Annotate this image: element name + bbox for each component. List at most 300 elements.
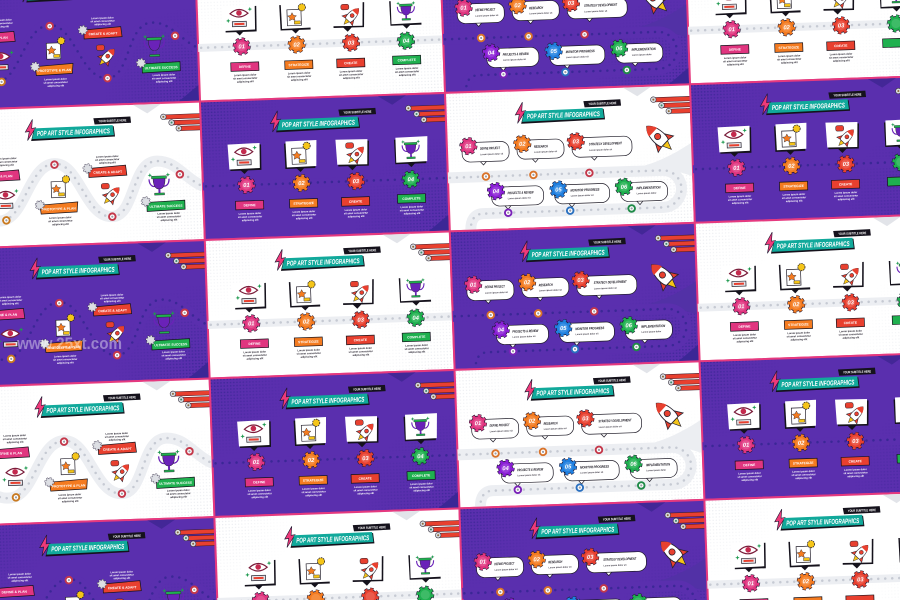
icon cards with numbered gears: 01 bbox=[743, 443, 749, 449]
four icon cards with numbered gears: DEFINE bbox=[244, 203, 257, 208]
four icon cards with numbered gears: adipiscing elit bbox=[408, 350, 425, 354]
four icon cards with numbered gears: sit amet consectetur bbox=[247, 492, 272, 496]
winding road steps: adipiscing elit bbox=[109, 438, 126, 442]
road with six numbered speech bubbles: Lorem ipsum dolor sit bbox=[503, 58, 526, 62]
winding road steps: Lorem ipsum dolor bbox=[157, 212, 180, 216]
road with six numbered speech bubbles: 03 bbox=[582, 416, 590, 422]
icon cards with numbered gears: STRATEGIZE bbox=[788, 322, 810, 327]
road with six numbered speech bubbles: Lorem ipsum dolor sit bbox=[534, 150, 557, 154]
heading bbox=[769, 364, 900, 392]
winding road steps: sit amet consectetur bbox=[90, 19, 115, 23]
panel: road slide, white, row four bbox=[455, 361, 705, 509]
four icon cards with numbered gears: 02 bbox=[293, 42, 301, 49]
four icon cards with numbered gears: 02 bbox=[298, 181, 306, 187]
road with six numbered speech bubbles: 03 bbox=[568, 1, 575, 7]
four icon cards with numbered gears: Lorem ipsum dolor bbox=[234, 73, 257, 77]
heading: YOUR SUBTITLE HERE bbox=[598, 378, 627, 383]
road with six numbered speech bubbles: 05 bbox=[555, 187, 563, 194]
heading: YOUR SUBTITLE HERE bbox=[108, 395, 137, 400]
road with six numbered speech bubbles: 02 bbox=[519, 142, 526, 148]
icon cards with numbered gears: adipiscing elit bbox=[741, 478, 758, 482]
winding road steps: Lorem ipsum dolor bbox=[59, 493, 81, 497]
four icon cards with numbered gears: Lorem ipsum dolor bbox=[340, 70, 362, 74]
road with six numbered speech bubbles: Lorem ipsum dolor sit bbox=[571, 194, 594, 198]
four icon cards with numbered gears: sit amet consectetur bbox=[400, 209, 424, 212]
road with six numbered speech bubbles: 06 bbox=[630, 462, 638, 468]
four icon cards with numbered gears: Lorem ipsum dolor bbox=[302, 487, 325, 491]
four icon cards with numbered gears: adipiscing elit bbox=[413, 489, 430, 493]
winding road steps: DEFINE & PLAN bbox=[2, 590, 28, 595]
four icon cards with numbered gears: adipiscing elit bbox=[353, 353, 369, 357]
icon cards with numbered gears: Lorem ipsum dolor bbox=[830, 53, 852, 56]
winding road steps: sit amet consectetur bbox=[161, 354, 186, 357]
road with six numbered speech bubbles: Lorem ipsum dolor sit bbox=[566, 55, 589, 59]
road with six numbered speech bubbles bbox=[446, 117, 695, 232]
winding road steps: PROTOTYPE & PLAN bbox=[47, 345, 81, 350]
four icon cards with numbered gears: sit amet consectetur bbox=[301, 490, 326, 494]
icon cards with numbered gears: CREATE bbox=[848, 459, 863, 464]
winding road steps: adipiscing elit bbox=[62, 500, 79, 503]
road with six numbered speech bubbles: RESEARCH bbox=[539, 283, 553, 287]
road with six numbered speech bubbles: 04 bbox=[488, 51, 495, 57]
four icon cards with numbered gears: DEFINE bbox=[253, 480, 266, 485]
panel: card slide, white, row three, right column bbox=[695, 214, 900, 361]
winding road steps: CREATE & ADAPT bbox=[108, 585, 137, 590]
heading bbox=[25, 113, 202, 141]
winding road steps: CREATE & ADAPT bbox=[98, 308, 127, 313]
panel: wave slide, purple, bottom row bbox=[0, 517, 220, 600]
four icon cards with numbered gears bbox=[216, 551, 463, 600]
winding road steps: adipiscing elit bbox=[2, 302, 19, 306]
four icon cards with numbered gears: adipiscing elit bbox=[291, 78, 308, 82]
four icon cards with numbered gears: adipiscing elit bbox=[399, 73, 416, 77]
winding road steps: adipiscing elit bbox=[113, 577, 130, 580]
heading: YOUR SUBTITLE HERE bbox=[348, 248, 377, 253]
winding road steps: Lorem ipsum dolor bbox=[91, 16, 114, 20]
road with six numbered speech bubbles: 01 bbox=[470, 283, 477, 289]
winding road steps bbox=[0, 12, 200, 91]
four icon cards with numbered gears: adipiscing elit bbox=[357, 492, 374, 496]
road with six numbered speech bubbles: STRATEGY DEVELOPMENT bbox=[584, 3, 618, 8]
road with six numbered speech bubbles: Lorem ipsum dolor sit bbox=[529, 12, 553, 15]
icon cards with numbered gears: STRATEGIZE bbox=[793, 461, 814, 466]
winding road steps: Lorem ipsum dolor bbox=[101, 293, 123, 297]
heading: POP ART STYLE INFOGRAPHICS bbox=[296, 535, 370, 545]
road with numbered speech bubbles: RESEARCH bbox=[548, 560, 563, 564]
winding road steps bbox=[0, 428, 214, 506]
road with six numbered speech bubbles: MONITOR PROGRESS bbox=[566, 49, 595, 54]
four icon cards with numbered gears: DEFINE bbox=[239, 65, 252, 69]
heading bbox=[34, 390, 212, 418]
heading: POP ART STYLE INFOGRAPHICS bbox=[287, 258, 360, 268]
road with six numbered speech bubbles: 06 bbox=[625, 323, 633, 329]
four icon cards with numbered gears: adipiscing elit bbox=[247, 357, 264, 361]
road with six numbered speech bubbles: Lorem ipsum dolor sit bbox=[480, 152, 503, 156]
four icon cards with numbered gears: 04 bbox=[403, 39, 410, 45]
four icon cards with numbered gears: sit amet consectetur bbox=[409, 486, 434, 489]
road with six numbered speech bubbles: Lorem ipsum dolor sit bbox=[539, 289, 562, 292]
winding road steps: sit amet consectetur bbox=[48, 219, 73, 223]
winding road steps: Lorem ipsum dolor bbox=[54, 355, 76, 358]
heading: POP ART STYLE INFOGRAPHICS bbox=[786, 518, 860, 528]
winding road steps: adipiscing elit bbox=[99, 161, 116, 165]
heading: POP ART STYLE INFOGRAPHICS bbox=[772, 103, 845, 112]
four icon cards with numbered gears bbox=[211, 412, 459, 501]
heading bbox=[760, 87, 900, 115]
heading: YOUR SUBTITLE HERE bbox=[343, 110, 372, 115]
icon cards with numbered gears: STRATEGIZE bbox=[783, 184, 805, 189]
winding road steps: ULTIMATE SUCCESS bbox=[149, 204, 183, 209]
heading bbox=[529, 511, 706, 539]
winding road steps: adipiscing elit bbox=[57, 361, 74, 365]
road with six numbered speech bubbles: DEFINE PROJECT bbox=[475, 7, 496, 12]
heading bbox=[279, 381, 457, 410]
icon cards with numbered gears: STRATEGIZE bbox=[778, 45, 800, 50]
road with six numbered speech bubbles: 04 bbox=[497, 328, 505, 334]
icon cards with numbered gears: sit amet consectetur bbox=[843, 471, 868, 475]
road with six numbered speech bubbles: 03 bbox=[572, 139, 580, 145]
winding road steps: sit amet consectetur bbox=[53, 358, 77, 362]
icon cards with numbered gears: adipiscing elit bbox=[781, 61, 798, 65]
winding road steps: adipiscing elit bbox=[94, 23, 111, 26]
road with six numbered speech bubbles bbox=[451, 255, 700, 370]
four icon cards with numbered gears: sit amet consectetur bbox=[344, 211, 368, 215]
icon cards with numbered gears: Lorem ipsum dolor bbox=[778, 54, 800, 58]
winding road steps: Lorem ipsum dolor bbox=[162, 350, 185, 354]
four icon cards with numbered gears bbox=[197, 0, 444, 85]
four icon cards with numbered gears: Lorem ipsum dolor bbox=[288, 72, 310, 75]
four icon cards with numbered gears: STRATEGIZE bbox=[298, 340, 320, 344]
four icon cards with numbered gears: adipiscing elit bbox=[237, 80, 254, 84]
four icon cards with numbered gears: Lorem ipsum dolor bbox=[400, 205, 423, 209]
road with six numbered speech bubbles: IMPLEMENTATION bbox=[636, 185, 661, 190]
winding road steps bbox=[0, 151, 205, 229]
four icon cards with numbered gears: 03 bbox=[353, 179, 360, 185]
winding road steps: adipiscing elit bbox=[165, 357, 182, 361]
icon cards with numbered gears: adipiscing elit bbox=[732, 201, 749, 205]
panel: road slide, purple, bottom row bbox=[459, 500, 710, 600]
four icon cards with numbered gears: sit amet consectetur bbox=[243, 354, 267, 358]
road with numbered speech bubbles bbox=[461, 532, 709, 600]
four icon cards with numbered gears: sit amet consectetur bbox=[292, 213, 316, 217]
road with six numbered speech bubbles: PROJECTS & REVIEW bbox=[517, 467, 544, 472]
four icon cards with numbered gears: adipiscing elit bbox=[305, 494, 322, 497]
road with six numbered speech bubbles: STRATEGY DEVELOPMENT bbox=[589, 141, 623, 146]
heading bbox=[270, 104, 447, 133]
panel: card slide, purple, row four bbox=[210, 370, 460, 517]
road with numbered speech bubbles: 01 bbox=[479, 560, 486, 566]
icon cards with numbered gears: sit amet consectetur bbox=[777, 58, 801, 61]
winding road steps: ULTIMATE SUCCESS bbox=[159, 481, 193, 486]
winding road steps: sit amet consectetur bbox=[95, 158, 120, 162]
panel: wave slide, white, row four bbox=[0, 379, 215, 526]
road with six numbered speech bubbles: MONITOR PROGRESS bbox=[580, 465, 610, 470]
four icon cards with numbered gears bbox=[201, 135, 449, 224]
icon cards with numbered gears: 02 bbox=[783, 25, 791, 31]
road with six numbered speech bubbles: Lorem ipsum dolor sit bbox=[508, 196, 531, 200]
icon cards with numbered gears: sit amet consectetur bbox=[834, 194, 858, 198]
four icon cards with numbered gears: 02 bbox=[308, 458, 315, 464]
winding road steps: Lorem ipsum dolor bbox=[49, 216, 72, 220]
winding road steps: adipiscing elit bbox=[170, 496, 187, 499]
icon cards with numbered gears: Lorem ipsum dolor bbox=[724, 56, 747, 60]
icon cards with numbered gears: Lorem ipsum dolor bbox=[787, 331, 810, 335]
heading: YOUR SUBTITLE HERE bbox=[588, 101, 617, 106]
icon cards with numbered gears: DEFINE bbox=[729, 47, 742, 52]
winding road steps: PROTOTYPE & PLAN bbox=[52, 483, 86, 489]
winding road steps: sit amet consectetur bbox=[105, 435, 129, 439]
winding road steps: adipiscing elit bbox=[7, 441, 24, 444]
winding road steps: Lorem ipsum dolor bbox=[153, 73, 175, 77]
winding road steps: sit amet consectetur bbox=[58, 496, 82, 500]
winding road steps: Lorem ipsum dolor bbox=[44, 78, 67, 81]
road with six numbered speech bubbles: Lorem ipsum dolor sit bbox=[594, 287, 617, 290]
road with six numbered speech bubbles: Lorem ipsum dolor sit bbox=[589, 148, 612, 152]
four icon cards with numbered gears: CREATE bbox=[349, 199, 363, 204]
winding road steps: Lorem ipsum dolor bbox=[3, 434, 26, 438]
four icon cards with numbered gears: 01 bbox=[238, 44, 245, 51]
four icon cards with numbered gears: COMPLETE bbox=[412, 473, 431, 478]
four icon cards with numbered gears: Lorem ipsum dolor bbox=[405, 344, 428, 348]
watermark: www.25xt.com bbox=[16, 334, 122, 353]
icon cards with numbered gears: 01 bbox=[728, 27, 735, 33]
road with six numbered speech bubbles: IMPLEMENTATION bbox=[632, 47, 656, 52]
road with six numbered speech bubbles: Lorem ipsum dolor sit bbox=[517, 473, 541, 477]
icon cards with numbered gears: DEFINE bbox=[738, 324, 751, 329]
icon cards with numbered gears: sit amet consectetur bbox=[787, 335, 811, 338]
road with six numbered speech bubbles: Lorem ipsum dolor sit bbox=[544, 427, 567, 431]
winding road steps: adipiscing elit bbox=[161, 219, 178, 222]
road with six numbered speech bubbles: STRATEGY DEVELOPMENT bbox=[598, 418, 632, 423]
icon cards with numbered gears: Lorem ipsum dolor bbox=[844, 468, 867, 472]
icon cards with numbered gears: CREATE bbox=[839, 182, 853, 187]
icon cards with numbered gears: adipiscing elit bbox=[737, 340, 754, 344]
winding road steps: sit amet consectetur bbox=[157, 215, 181, 219]
four icon cards with numbered gears: Lorem ipsum dolor bbox=[410, 482, 433, 486]
heading: POP ART STYLE INFOGRAPHICS bbox=[527, 111, 600, 121]
four icon cards with numbered gears: 04 bbox=[412, 316, 420, 322]
road with six numbered speech bubbles: PROJECTS & REVIEW bbox=[503, 52, 529, 57]
four icon cards with numbered gears: 02 bbox=[303, 319, 310, 326]
four icon cards with numbered gears: sit amet consectetur bbox=[405, 347, 429, 351]
four icon cards with numbered gears: sit amet consectetur bbox=[349, 350, 373, 354]
icon cards with numbered gears: adipiscing elit bbox=[843, 336, 859, 340]
four icon cards with numbered gears: Lorem ipsum dolor bbox=[248, 489, 271, 493]
road with numbered speech bubbles: STRATEGY DEVELOPMENT bbox=[603, 557, 637, 562]
panel: card slide, white, top row, right column bbox=[685, 0, 900, 84]
four icon cards with numbered gears: Lorem ipsum dolor bbox=[297, 349, 320, 352]
icon cards with numbered gears: sit amet consectetur bbox=[839, 333, 863, 337]
icon cards with numbered gears: sit amet consectetur bbox=[723, 59, 747, 63]
heading bbox=[284, 520, 461, 548]
four icon cards with numbered gears: 03 bbox=[362, 456, 370, 462]
heading bbox=[524, 373, 702, 401]
panel: card slide, white, bottom row bbox=[214, 508, 465, 600]
four icon cards with numbered gears: COMPLETE bbox=[397, 58, 417, 62]
four icon cards with numbered gears: 03 bbox=[348, 40, 355, 47]
heading: YOUR SUBTITLE HERE bbox=[98, 118, 127, 123]
four icon cards with numbered gears: 03 bbox=[357, 317, 365, 324]
panel: wave slide, white, row two bbox=[0, 102, 206, 249]
icon cards with numbered gears: Lorem ipsum dolor bbox=[733, 333, 756, 337]
heading: YOUR SUBTITLE HERE bbox=[358, 525, 387, 530]
four icon cards with numbered gears: COMPLETE bbox=[407, 335, 426, 339]
icon cards with numbered gears: 03 bbox=[852, 439, 860, 445]
icon cards with numbered gears: 02 bbox=[793, 302, 800, 308]
road with six numbered speech bubbles: RESEARCH bbox=[529, 6, 544, 10]
road with six numbered speech bubbles: IMPLEMENTATION bbox=[646, 462, 670, 467]
heading bbox=[20, 0, 197, 3]
road with six numbered speech bubbles: MONITOR PROGRESS bbox=[570, 188, 600, 193]
road with six numbered speech bubbles: 03 bbox=[577, 278, 585, 284]
four icon cards with numbered gears: Lorem ipsum dolor bbox=[354, 485, 377, 489]
icon cards with numbered gears: adipiscing elit bbox=[833, 59, 850, 63]
winding road steps: sit amet consectetur bbox=[3, 437, 27, 441]
icon cards with numbered gears bbox=[701, 395, 900, 483]
icon cards with numbered gears: 03 bbox=[857, 577, 864, 584]
icon cards with numbered gears bbox=[706, 534, 900, 600]
heading: YOUR SUBTITLE HERE bbox=[113, 534, 142, 539]
icon cards with numbered gears: 01 bbox=[733, 166, 740, 172]
heading: POP ART STYLE INFOGRAPHICS bbox=[42, 267, 115, 276]
winding road steps bbox=[0, 566, 219, 600]
winding road steps: CREATE & ADAPT bbox=[103, 447, 132, 452]
icon cards with numbered gears: Lorem ipsum dolor bbox=[839, 330, 862, 333]
four icon cards with numbered gears: adipiscing elit bbox=[242, 219, 259, 222]
road with six numbered speech bubbles: DEFINE PROJECT bbox=[480, 146, 501, 151]
four icon cards with numbered gears: sit amet consectetur bbox=[297, 352, 321, 356]
road with six numbered speech bubbles: 06 bbox=[621, 185, 628, 191]
icon cards with numbered gears: Lorem ipsum dolor bbox=[783, 193, 805, 197]
road with six numbered speech bubbles: 02 bbox=[524, 280, 531, 286]
icon cards with numbered gears: Lorem ipsum dolor bbox=[835, 191, 857, 195]
road with six numbered speech bubbles bbox=[456, 394, 704, 509]
four icon cards with numbered gears: sit amet consectetur bbox=[233, 77, 257, 81]
winding road steps: sit amet consectetur bbox=[8, 576, 32, 580]
four icon cards with numbered gears: 04 bbox=[408, 177, 415, 183]
icon cards with numbered gears: adipiscing elit bbox=[786, 200, 803, 203]
road with six numbered speech bubbles: IMPLEMENTATION bbox=[641, 324, 666, 329]
road with six numbered speech bubbles: RESEARCH bbox=[534, 144, 548, 149]
road with numbered speech bubbles: DEFINE PROJECT bbox=[494, 561, 515, 566]
four icon cards with numbered gears: COMPLETE bbox=[402, 196, 422, 201]
four icon cards with numbered gears: sit amet consectetur bbox=[339, 73, 363, 77]
icon cards with numbered gears: DEFINE bbox=[734, 186, 747, 190]
winding road steps: Lorem ipsum dolor bbox=[8, 572, 31, 576]
road with six numbered speech bubbles: Lorem ipsum dolor sit bbox=[485, 291, 508, 295]
road with six numbered speech bubbles: Lorem ipsum dolor sit bbox=[475, 14, 499, 18]
winding road steps: sit amet consectetur bbox=[100, 296, 124, 300]
icon cards with numbered gears: 02 bbox=[788, 164, 796, 170]
heading: POP ART STYLE INFOGRAPHICS bbox=[46, 405, 120, 415]
panel: wave slide, purple, row three bbox=[0, 240, 210, 387]
road with numbered speech bubbles: Lorem ipsum dolor sit bbox=[548, 566, 572, 569]
road with six numbered speech bubbles: STRATEGY DEVELOPMENT bbox=[594, 280, 627, 285]
icon cards with numbered gears: 02 bbox=[803, 579, 810, 585]
icon cards with numbered gears: 03 bbox=[847, 300, 855, 307]
winding road steps: adipiscing elit bbox=[47, 84, 64, 88]
four icon cards with numbered gears bbox=[206, 274, 454, 362]
road with six numbered speech bubbles: 05 bbox=[565, 464, 572, 471]
winding road steps: adipiscing elit bbox=[104, 300, 121, 303]
winding road steps: Lorem ipsum dolor bbox=[105, 432, 128, 436]
icon cards with numbered gears: sit amet consectetur bbox=[782, 196, 806, 200]
four icon cards with numbered gears: adipiscing elit bbox=[251, 496, 268, 499]
heading bbox=[275, 243, 452, 271]
icon cards with numbered gears: adipiscing elit bbox=[838, 198, 855, 201]
icon cards with numbered gears: CREATE bbox=[834, 44, 848, 48]
four icon cards with numbered gears: sit amet consectetur bbox=[238, 215, 262, 219]
four icon cards with numbered gears: adipiscing elit bbox=[301, 355, 317, 359]
heading: POP ART STYLE INFOGRAPHICS bbox=[51, 544, 125, 553]
icon cards with numbered gears: adipiscing elit bbox=[795, 477, 812, 480]
heading: POP ART STYLE INFOGRAPHICS bbox=[37, 128, 110, 138]
road with numbered speech bubbles: Lorem ipsum dolor sit bbox=[495, 568, 518, 572]
panel: road slide, purple, row three bbox=[450, 223, 701, 370]
heading: YOUR SUBTITLE HERE bbox=[833, 93, 862, 97]
four icon cards with numbered gears: STRATEGIZE bbox=[303, 478, 324, 483]
road with six numbered speech bubbles: Lorem ipsum dolor sit bbox=[580, 471, 604, 475]
road with six numbered speech bubbles: RESEARCH bbox=[543, 421, 558, 426]
heading: POP ART STYLE INFOGRAPHICS bbox=[532, 250, 605, 259]
icon cards with numbered gears: sit amet consectetur bbox=[737, 475, 762, 479]
icon cards with numbered gears: CREATE bbox=[844, 321, 858, 325]
heading bbox=[774, 502, 900, 531]
road with six numbered speech bubbles: Lorem ipsum dolor sit bbox=[599, 425, 622, 429]
heading bbox=[520, 234, 697, 262]
icon cards with numbered gears: adipiscing elit bbox=[791, 338, 807, 342]
heading bbox=[30, 251, 207, 280]
panel: card slide, white, row three bbox=[205, 231, 455, 379]
four icon cards with numbered gears: adipiscing elit bbox=[348, 215, 365, 219]
icon cards with numbered gears: Lorem ipsum dolor bbox=[738, 472, 761, 476]
heading: POP ART STYLE INFOGRAPHICS bbox=[541, 527, 615, 536]
heading: YOUR SUBTITLE HERE bbox=[843, 370, 872, 374]
road with six numbered speech bubbles: Lorem ipsum dolor sit bbox=[575, 332, 599, 336]
heading: POP ART STYLE INFOGRAPHICS bbox=[536, 388, 610, 398]
road with six numbered speech bubbles: Lorem ipsum dolor bbox=[637, 193, 657, 195]
road with numbered speech bubbles: Lorem ipsum dolor sit bbox=[603, 564, 627, 567]
winding road steps: adipiscing elit bbox=[156, 80, 173, 84]
heading: YOUR SUBTITLE HERE bbox=[838, 231, 867, 236]
winding road steps: adipiscing elit bbox=[11, 579, 28, 583]
icon cards with numbered gears: sit amet consectetur bbox=[733, 336, 757, 340]
winding road steps: CREATE & ADAPT bbox=[89, 31, 117, 36]
road with six numbered speech bubbles: 04 bbox=[493, 189, 500, 195]
four icon cards with numbered gears: Lorem ipsum dolor bbox=[243, 350, 266, 354]
four icon cards with numbered gears: adipiscing elit bbox=[296, 217, 313, 220]
four icon cards with numbered gears: CREATE bbox=[344, 61, 358, 65]
icon cards with numbered gears: sit amet consectetur bbox=[728, 198, 752, 202]
icon cards with numbered gears bbox=[691, 118, 900, 206]
road with six numbered speech bubbles: PROJECTS & REVIEW bbox=[507, 190, 534, 195]
heading: YOUR SUBTITLE HERE bbox=[353, 387, 382, 392]
icon cards with numbered gears: Lorem ipsum dolor bbox=[792, 470, 815, 474]
winding road steps: Lorem ipsum dolor bbox=[96, 155, 119, 159]
icon cards with numbered gears: DEFINE bbox=[743, 463, 756, 467]
four icon cards with numbered gears: STRATEGIZE bbox=[288, 63, 310, 67]
road with six numbered speech bubbles: 02 bbox=[514, 3, 522, 9]
icon cards with numbered gears: 03 bbox=[838, 23, 845, 30]
winding road steps: sit amet consectetur bbox=[166, 492, 191, 496]
heading: YOUR SUBTITLE HERE bbox=[603, 517, 632, 522]
heading: POP ART STYLE INFOGRAPHICS bbox=[291, 397, 365, 406]
road with six numbered speech bubbles: 06 bbox=[616, 46, 623, 52]
icon cards with numbered gears bbox=[687, 0, 900, 68]
icon cards with numbered gears: 03 bbox=[843, 162, 850, 168]
road with six numbered speech bubbles: Lorem ipsum dolor sit bbox=[584, 10, 608, 13]
four icon cards with numbered gears: sit amet consectetur bbox=[287, 75, 311, 79]
